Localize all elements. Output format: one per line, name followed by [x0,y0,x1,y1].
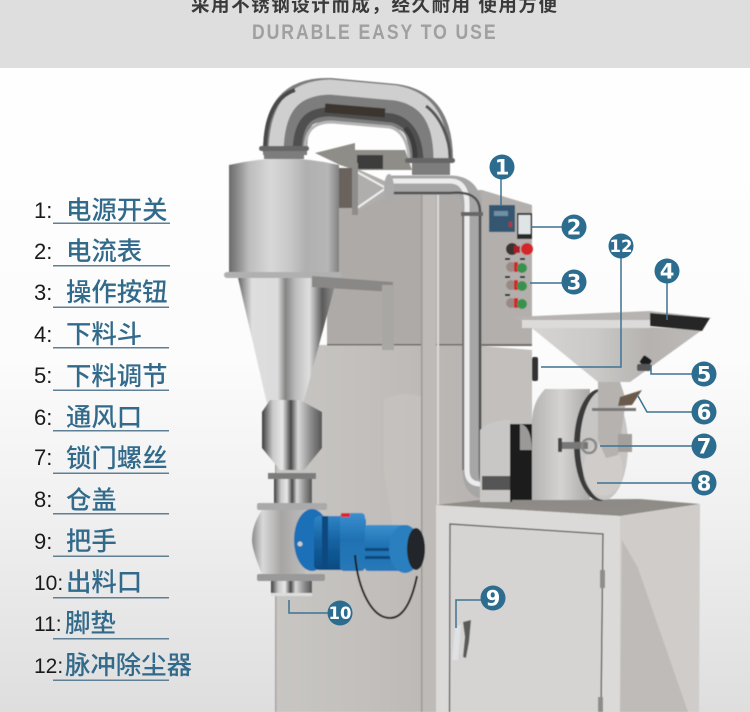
badge 1: 1 [495,156,509,180]
legend row 9: 把手 [66,528,117,556]
legend row 6: 6: [34,405,52,430]
badge 3: 3 [567,270,581,294]
badge 10: 10 [329,604,351,623]
legend row 2 [34,238,170,266]
cabinet door [449,524,605,712]
rear housing [275,143,482,712]
header band [0,0,750,68]
hopper [513,311,712,382]
badge 10 [328,600,352,626]
legend row 4 [34,321,169,349]
badge 5 [692,362,716,386]
badge 8 [692,470,716,496]
legend row 1: 1: [34,198,52,223]
legend row 10: 出料口 [66,569,142,597]
legend row 6: 通风口 [66,404,142,432]
control panel [482,190,533,500]
legend row 3: 操作按钮 [66,279,168,307]
badge 1 [490,154,514,180]
overhead duct [265,87,450,160]
callout leader lines [289,170,704,628]
cylinder [229,158,339,275]
legend row 10 [34,569,169,598]
heading: English subtitle: DURABLE EASY TO USE [252,20,498,44]
rotary valve [252,503,327,596]
buttons [505,243,533,309]
feed chute [592,382,636,458]
grinder casing [512,389,637,505]
badge 6 [692,400,716,424]
neck [268,473,316,505]
badge 6: 6 [697,400,711,424]
inlet funnel [352,163,394,215]
legend row 5: 5: [34,363,52,388]
legend row 5: 下料调节 [66,363,168,391]
badge 3 [562,270,586,294]
lock screws [558,434,632,453]
legend row 9: 9: [34,529,52,554]
badge 9 [480,586,506,610]
pulse dust collector [224,146,455,505]
motor cable [355,555,417,618]
legend row 4: 下料斗 [66,321,142,349]
badge 12: 12 [610,237,632,256]
flange [224,272,342,278]
blue motor [294,509,425,573]
legend row 6 [34,404,169,432]
vent [618,390,642,406]
badge 4 [654,258,680,284]
legend row 11: 脚垫 [65,610,116,638]
legend row 8: 仓盖 [66,487,117,515]
machine illustration [224,87,712,712]
legend row 7: 7: [34,445,52,470]
legend row 4: 4: [34,322,52,347]
parts legend [34,197,192,681]
legend row 12: 12: [34,655,63,678]
cabinet base [436,499,700,712]
badge 2: 2 [567,216,581,240]
ammeter [517,213,532,239]
badge 8: 8 [697,472,711,496]
callout badges [328,154,716,626]
power switch display [489,205,515,232]
badge 4: 4 [660,260,674,284]
legend row 8: 8: [34,487,52,512]
legend row 3: 3: [34,280,52,305]
legend row 9 [34,528,169,557]
badge 12 [608,234,634,258]
badge 2 [562,214,586,240]
top clamps [259,146,455,175]
legend row 12: 脉冲除尘器 [65,652,192,680]
legend row 11: 11: [34,613,62,636]
legend row 10: 10: [34,572,63,595]
bulge [262,400,322,470]
support arm [312,276,394,350]
legend row 2: 电流表 [66,238,142,266]
cross pipe [390,181,532,496]
legend row 7: 锁门螺丝 [66,445,168,473]
door handle [452,620,471,660]
badge 9: 9 [486,586,500,610]
legend row 8 [34,487,169,515]
legend row 2: 2: [34,239,52,264]
badge 7: 7 [697,434,711,458]
cone [238,278,337,408]
legend row 1: 电源开关 [66,197,168,225]
badge 7 [692,434,716,458]
feed adjuster [637,355,652,371]
legend row 11 [34,610,169,640]
badge 5: 5 [697,362,711,386]
grinder motor housing [480,357,538,502]
